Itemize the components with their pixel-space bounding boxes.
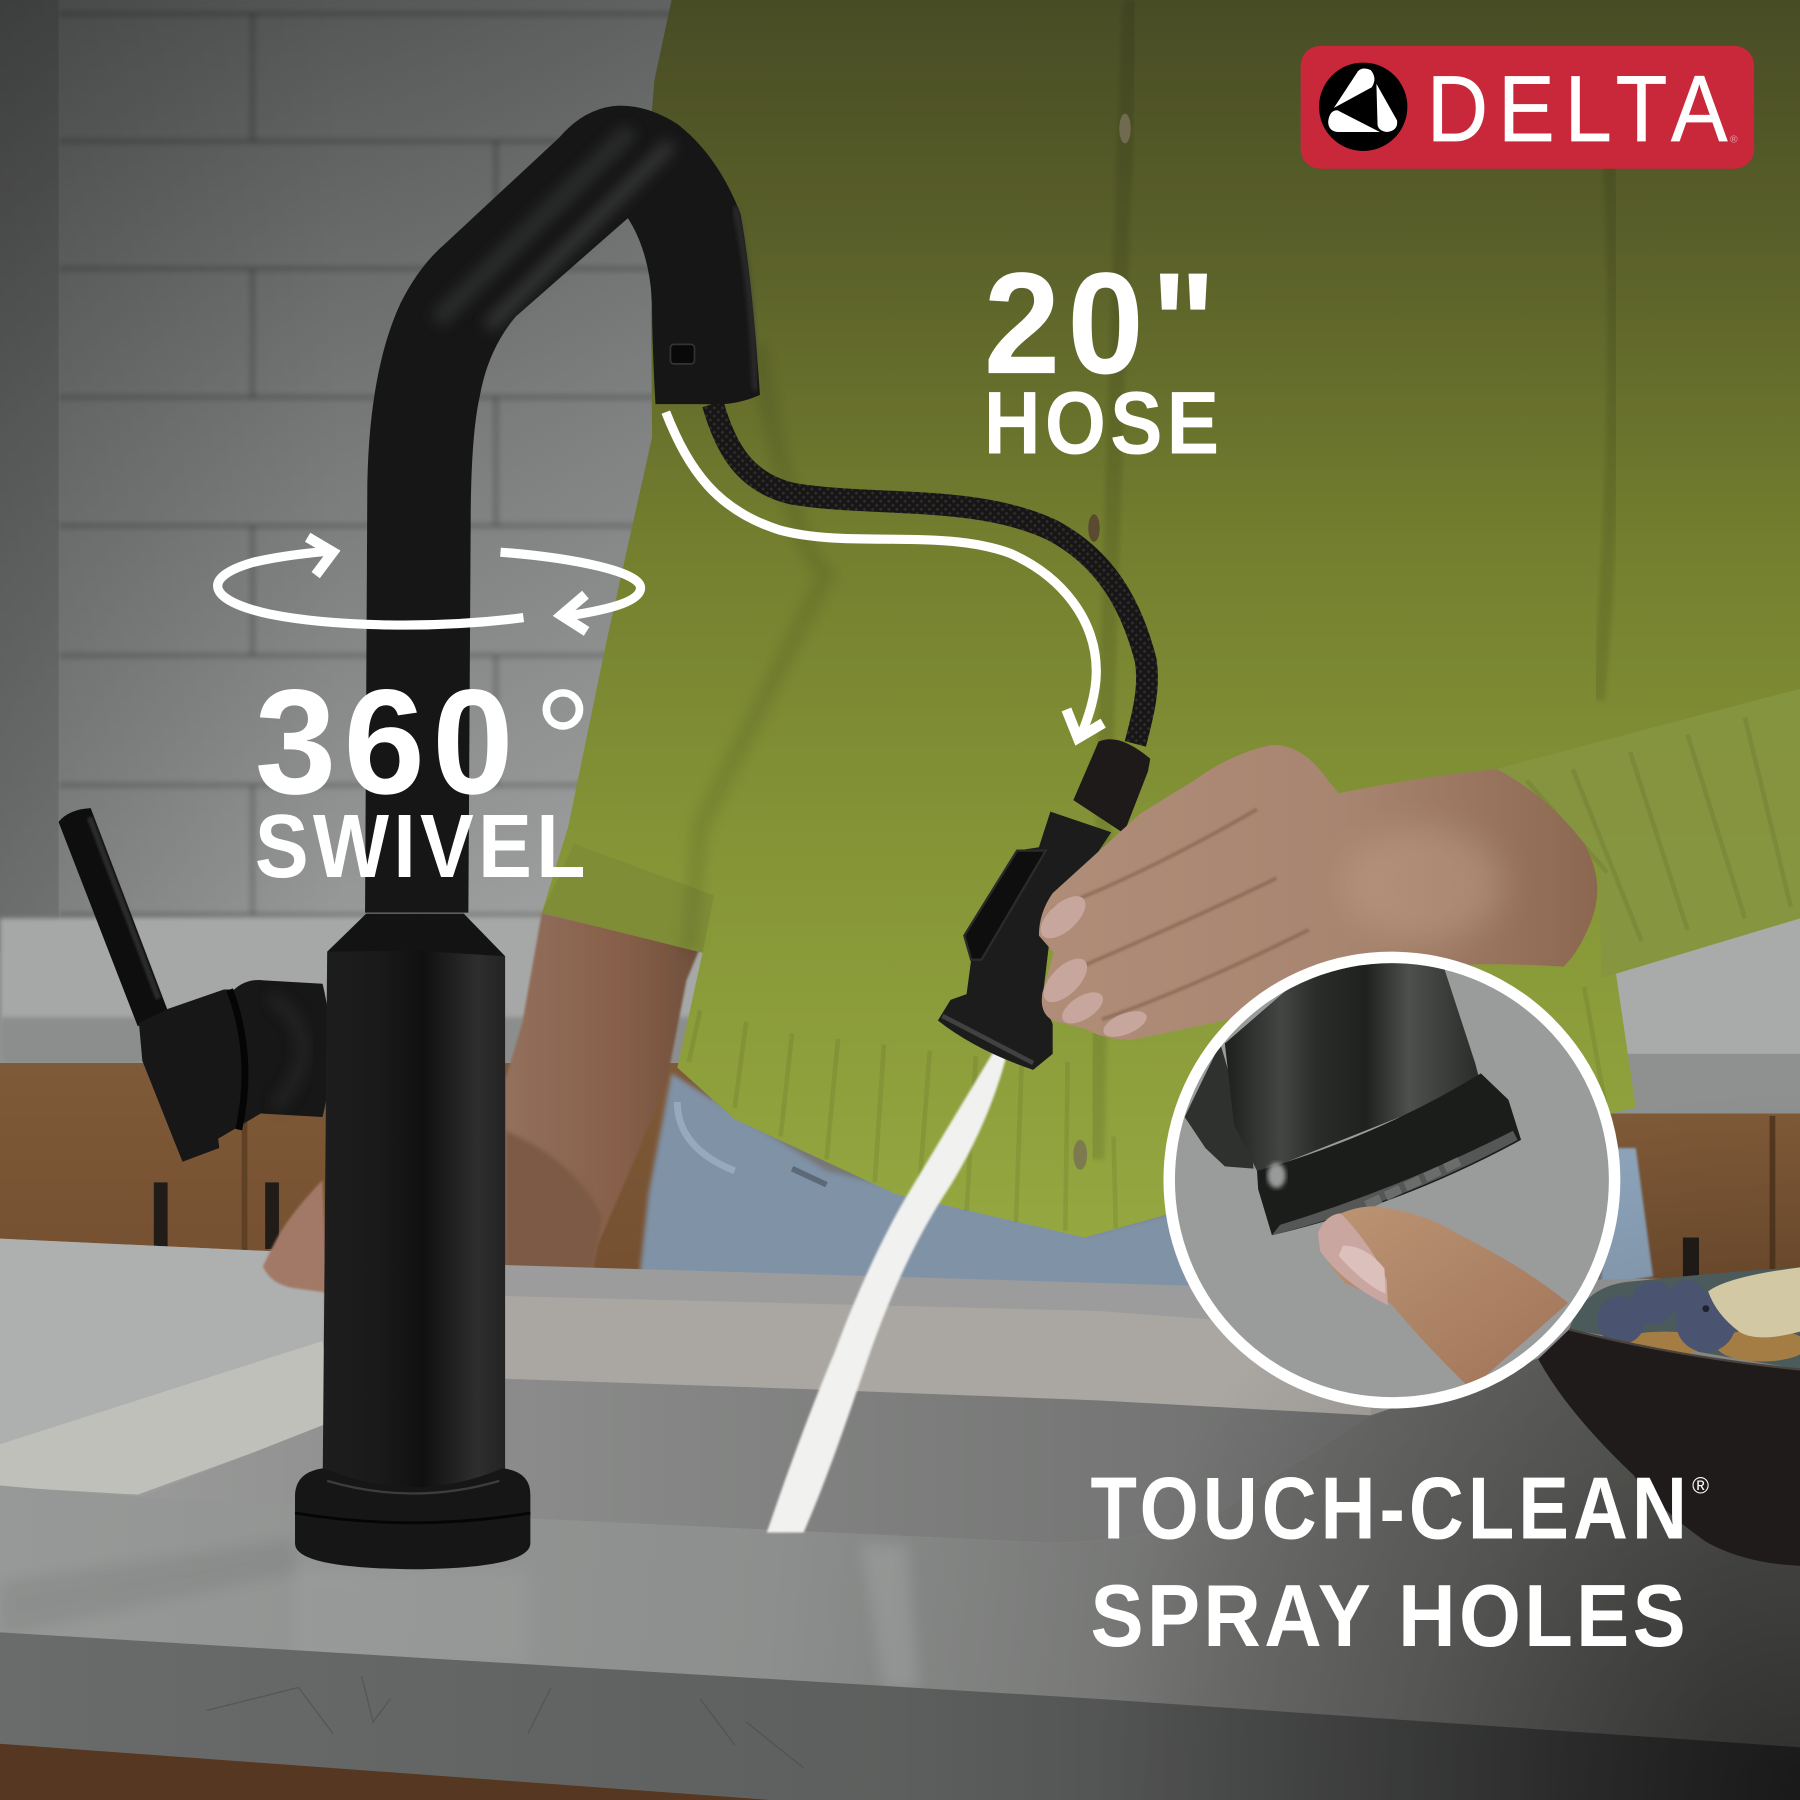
sweater buttons [1073, 114, 1131, 1170]
callout: touch-clean spray holes [1091, 1459, 1709, 1665]
faucet [59, 106, 1150, 1569]
jeans [637, 1073, 1653, 1297]
right forearm and hand [1033, 745, 1597, 1042]
arrow: swivel rotation [218, 537, 641, 631]
logo: Delta: ® [1730, 134, 1738, 145]
callout: 20 inch hose [984, 242, 1219, 473]
callout: 20 inch hose: 20" [984, 242, 1216, 404]
callout: 360 swivel: 360 [255, 659, 514, 826]
granola [1616, 1329, 1800, 1361]
faucet body [323, 914, 505, 1492]
callout: 360 swivel: SWIVEL [255, 797, 585, 897]
background: tiled wall [0, 0, 689, 953]
logo emblem [1319, 63, 1407, 151]
bowl exterior [1538, 1329, 1800, 1566]
logo wordmark: DELTA [1427, 56, 1728, 161]
blueberries [1597, 1280, 1736, 1352]
cabinet below counter [0, 1744, 771, 1800]
callout: 360 swivel: ° [534, 659, 592, 822]
callout: 20 inch hose: HOSE [984, 373, 1219, 473]
banana slice [1708, 1267, 1800, 1337]
callout: touch-clean spray holes: ® [1692, 1472, 1709, 1498]
counter: front surface [0, 1355, 1800, 1747]
callout: 360 swivel [255, 659, 592, 897]
sink: basin [138, 1373, 1371, 1543]
sink: rear wall [323, 1291, 1371, 1415]
arrow: hose direction [666, 412, 1103, 738]
lever handle [59, 808, 168, 1026]
inset: fingertip [1318, 1206, 1568, 1389]
base ring [295, 1468, 530, 1569]
background: rear counter and cabinets [0, 918, 1800, 1293]
counter: left surface [0, 1239, 323, 1444]
hose [713, 404, 1147, 744]
spray head [938, 739, 1150, 1070]
spout [365, 106, 760, 913]
fingernails [1033, 889, 1150, 1042]
countertop and sink [0, 1239, 1800, 1800]
callout: touch-clean spray holes: SPRAY HOLES [1091, 1566, 1686, 1665]
inset: spray head [1185, 947, 1521, 1235]
left hand on counter [263, 1180, 327, 1293]
logo: Delta [1301, 46, 1754, 169]
water stream [767, 1047, 1008, 1533]
left arm [505, 913, 700, 1270]
bowl of granola and fruit [1538, 1267, 1800, 1566]
callout: touch-clean spray holes: TOUCH-CLEAN [1091, 1459, 1687, 1558]
green sweater [542, 0, 1800, 1238]
counter: front edge [0, 1632, 1800, 1800]
inset circle: spray head close-up [1169, 947, 1615, 1403]
sink: left wall [0, 1341, 333, 1495]
